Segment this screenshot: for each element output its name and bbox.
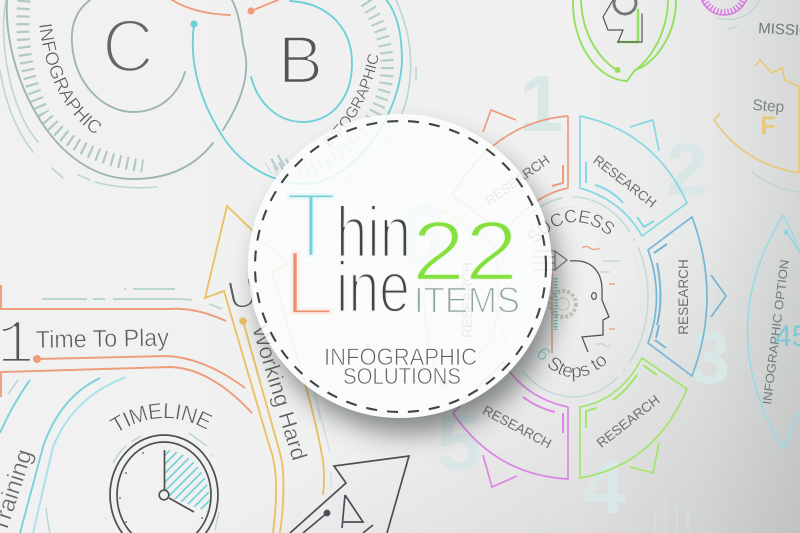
lens outline [748,215,800,448]
big step numbers: 3 [689,316,730,399]
letter C: C [102,4,154,88]
coral curves [172,0,278,15]
curved label right: INFOGRAPHIC [323,54,378,146]
head outline [570,261,609,352]
main badge circle [248,114,552,418]
panel: infographic option lens [748,215,800,448]
connector dots [190,7,255,28]
hatch bands [23,0,387,174]
yellow outline [714,60,800,173]
big step numbers: 1 [519,59,564,148]
panel: time to play [0,285,252,413]
badge rings [573,0,676,81]
segment 2 cyan [580,116,687,236]
segment 5 magenta [453,362,568,487]
pencil [533,251,567,270]
title hin: hin [336,193,411,273]
subtitle line 2: SOLUTIONS [343,363,461,389]
segment 1 coral [452,110,568,233]
curved heading 6 steps to: 6 Steps to [538,348,606,382]
title ine: ine [336,248,410,328]
yellow arrow [205,206,324,533]
segment 6 yellow [400,210,498,387]
research labels: RESEARCH [482,152,552,209]
research labels: RESEARCH [594,392,663,451]
vertical label: INFOGRAPHIC OPTION [760,259,792,405]
head outline [603,0,642,42]
panel: training [0,377,126,533]
arrow inner [303,495,373,533]
panel: green head badge [573,0,676,81]
icon: head with pencil and gear [533,246,620,353]
translucent disc [248,114,552,418]
cyan curves [193,0,402,184]
title letter L: L [283,230,335,335]
step letter: F [760,112,776,140]
panel: magenta mission badge [700,0,800,40]
letter B: B [278,22,323,98]
outer thin arcs [0,0,416,188]
numeral: U [224,270,261,319]
research labels: RESEARCH [590,152,659,211]
ticks [119,452,203,523]
gear [550,291,576,317]
clock hands [164,450,194,512]
big step numbers [400,59,730,530]
research labels: RESEARCH [676,259,691,335]
research labels [460,152,691,451]
panel: six step wheel [399,59,730,533]
cyan curves [0,377,126,533]
segment 4 green [580,358,687,478]
subtitle line 1: INFOGRAPHIC [324,344,477,371]
accents [582,246,615,329]
hatch [554,278,558,330]
research labels: RESEARCH [480,403,554,451]
panel: dark arrow [290,456,409,533]
arrow outline [290,456,409,533]
big step numbers: 6 [400,187,447,281]
panel: top left circles C and B [0,0,417,189]
curved heading success: SUCCESS [528,210,614,242]
main circle shadow [258,133,558,433]
panel: working hard arrow [205,206,331,533]
dashed outline [255,121,546,412]
inner dashed ring [498,197,648,397]
dashed ring [777,297,800,373]
big step numbers: 2 [666,128,707,211]
big step numbers: 5 [437,398,482,487]
title letter T: T [285,172,337,278]
step label: Step [752,97,785,116]
magenta hatch ring [703,0,745,12]
research labels: RESEARCH [460,262,475,338]
bottom ticks [530,497,688,533]
big step numbers: 4 [582,442,625,530]
gear [614,0,636,14]
curved label left: INFOGRAPHIC [39,24,102,133]
label: Working Hard [247,322,312,463]
extra faint lines [303,330,331,488]
circle outlines grey [7,0,246,179]
number 22: 22 [412,204,518,298]
hatched wedge [165,450,210,512]
clock rings [110,435,218,533]
outer dashes [46,433,219,533]
dashes [42,289,222,309]
label items: ITEMS [414,280,520,320]
panel: timeline clock [45,403,220,533]
segment 3 blue [648,217,726,376]
panel: step F [714,60,800,192]
coral route lines [1,285,252,413]
label: Time To Play [36,325,170,354]
curved title: TIMELINE [109,403,212,430]
